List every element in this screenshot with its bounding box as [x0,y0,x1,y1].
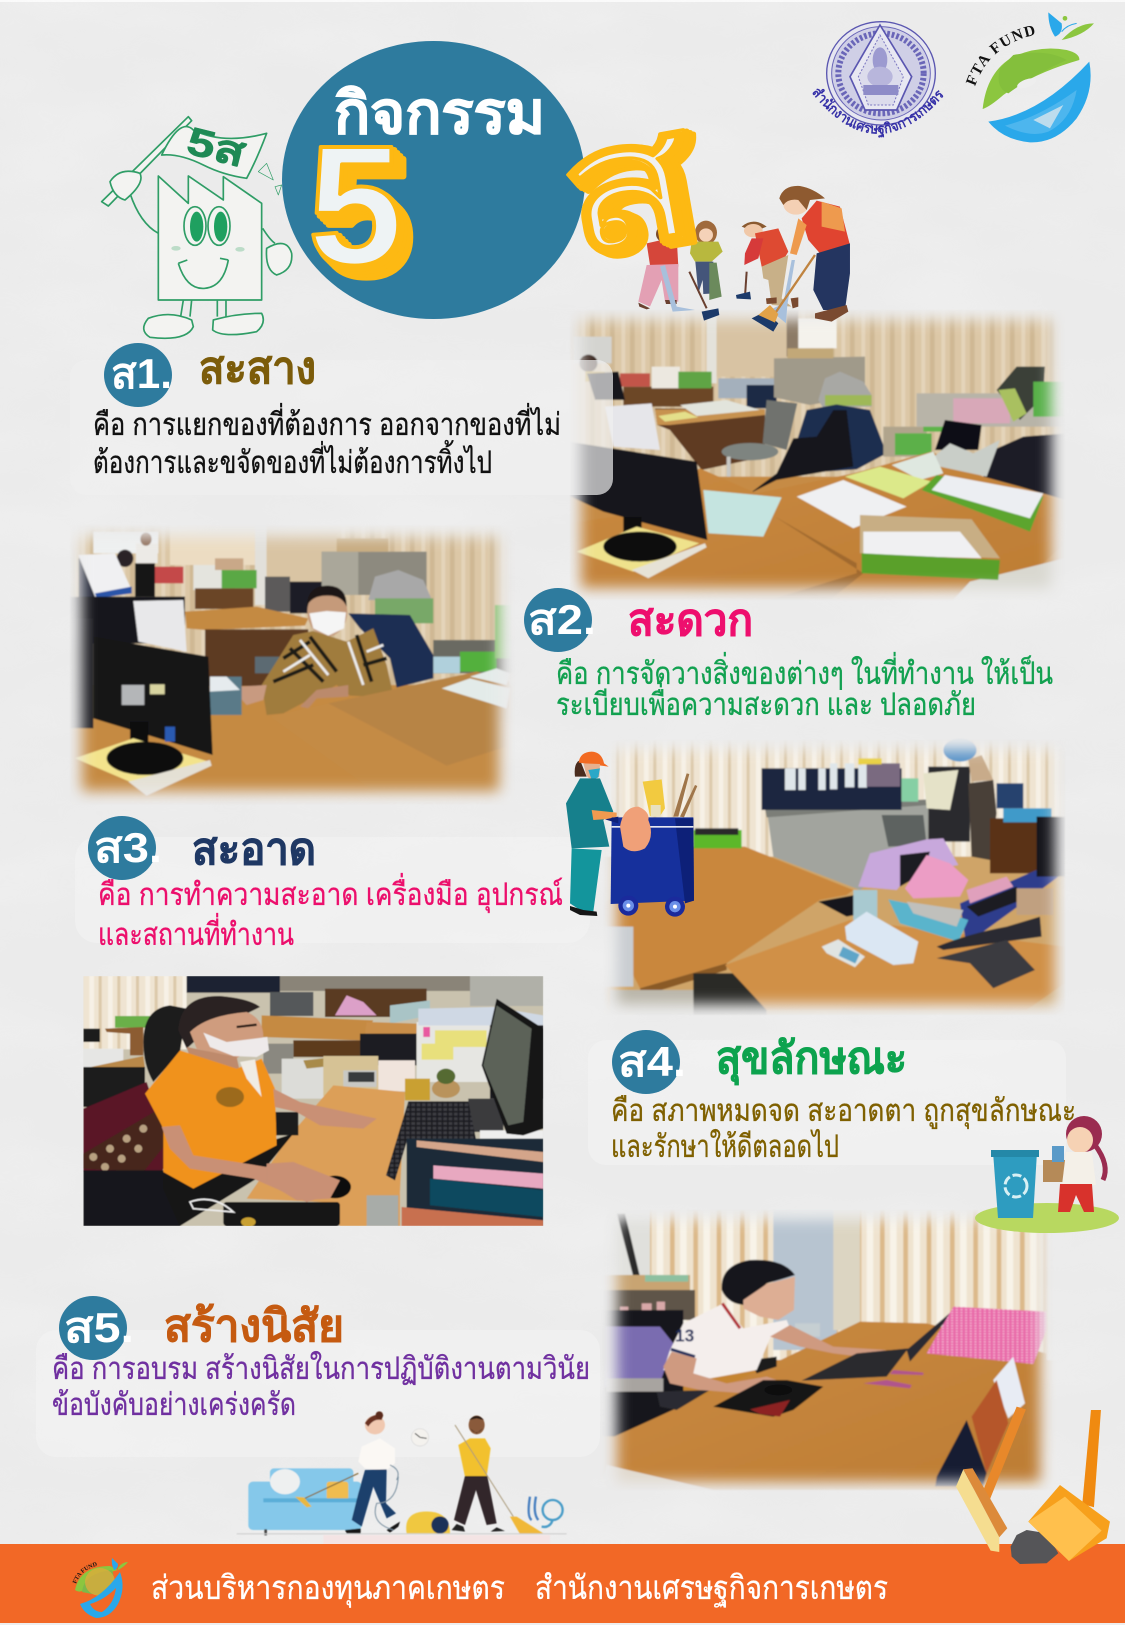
letter: ส: ส [550,81,711,293]
badge: ส3. [88,816,162,880]
text: definition 3: คือ การทำความสะอาด เครื่องมือ อุปกรณ์ [98,873,563,914]
icon: girl with recycling bin [975,1116,1119,1233]
text: definition 1 [93,403,561,480]
text: definition 5 [52,1351,590,1422]
icon: family sweeping [638,186,850,332]
badge: ส5.: ส5. [64,1304,134,1351]
text: definition 5: ข้อบังคับอย่างเคร่งครัด [52,1387,296,1422]
heading: สร้างนิสัย: สร้างนิสัย [164,1302,344,1351]
title: circle with heading [282,41,585,319]
badge: ส5. [59,1296,134,1360]
text: definition 1: คือ การแยกของที่ต้องการ ออกจากของที่ไม่ [93,403,561,442]
letter: ส: ส [556,84,718,296]
badge: ส1.: ส1. [111,350,172,397]
badge: ส1. [104,343,172,407]
heading: สะดวก: สะดวก [628,596,753,645]
photo: woman in orange shirt at computer [83,976,543,1227]
text: definition 1: ต้องการและขจัดของที่ไม่ต้องการทิ้งไป [93,440,492,480]
panel: section 4 backing [588,1040,1066,1165]
text: definition 4 [611,1093,1076,1164]
icon: 5ส mascot: 5ส [183,119,250,176]
text: department name: สำนักงานเศรษฐกิจการเกษตร [535,1569,888,1608]
section 4: สุขลักษณะ [611,1030,1076,1164]
number: 5: 5 [320,123,415,313]
section 5: สร้างนิสัย [52,1296,590,1422]
number: 5: 5 [311,114,406,304]
icon: 5ส mascot [102,117,292,338]
badge: ส4.: ส4. [618,1038,686,1085]
section 3: สะอาด [88,816,563,952]
text: definition 3 [98,873,563,952]
icon: FTA Fund small logo [72,1558,128,1618]
letter: ส: ส [546,80,708,291]
photo: tidy office with binders [603,738,1065,1015]
icon: cleaner pushing cart [566,752,697,917]
text: department name: ส่วนบริหารกองทุนภาคเกษตร [151,1569,505,1608]
icon: FTA Fund logo: FTA FUND [966,26,1034,86]
icon: couple cleaning with vacuum [237,1411,567,1544]
text: definition 3: และสถานที่ทำงาน [98,913,294,952]
photo: woman at desk wearing mask [70,525,515,805]
number: 5: 5 [317,120,412,310]
heading: สะสาง: สะสาง [199,344,316,393]
number: 5: 5 [314,117,409,307]
icon: broom and dustpan [956,1407,1110,1564]
icon: FTA Fund small logo: FTA FUND [72,1562,97,1584]
text: definition 5: คือ การอบรม สร้างนิสัยในการปฏิบัติงานตามวินัย [52,1351,590,1386]
badge: ส4. [612,1030,686,1094]
footer bar [0,1544,1125,1623]
text: department name [151,1569,888,1608]
badge: ส2.: ส2. [528,596,596,643]
panel: section 3 backing [75,837,590,943]
photo: messy office desks [570,310,1065,600]
text: definition 4: และรักษาให้ดีตลอดไป [611,1129,839,1164]
number: 5: 5 [308,111,403,301]
heading: สะอาด: สะอาด [192,825,316,874]
section 2: สะดวก [524,588,1053,722]
heading: สุขลักษณะ: สุขลักษณะ [716,1034,907,1086]
text: definition 2: ระเบียบเพื่อความสะดวก และ ปลอดภัย [556,683,976,722]
text: definition 2 [556,652,1053,722]
icon: FTA Fund logo [966,12,1094,142]
badge: ส3.: ส3. [94,824,162,871]
panel: section 5 backing [36,1330,600,1457]
icon: agriculture office seal: สำนักงานเศรษฐกิจการเกษตร [812,88,944,138]
panel: section 1 backing [70,360,613,495]
badge: ส2. [524,588,596,652]
section 1: สะสาง [93,343,561,480]
heading: กิจกรรม: กิจกรรม [334,81,545,146]
icon: agriculture office seal [812,21,944,138]
photo: woman using laptop on desk: 13 [675,1326,695,1346]
letter: ส: ส [553,82,714,294]
photo: woman using laptop on desk [600,1210,1067,1490]
